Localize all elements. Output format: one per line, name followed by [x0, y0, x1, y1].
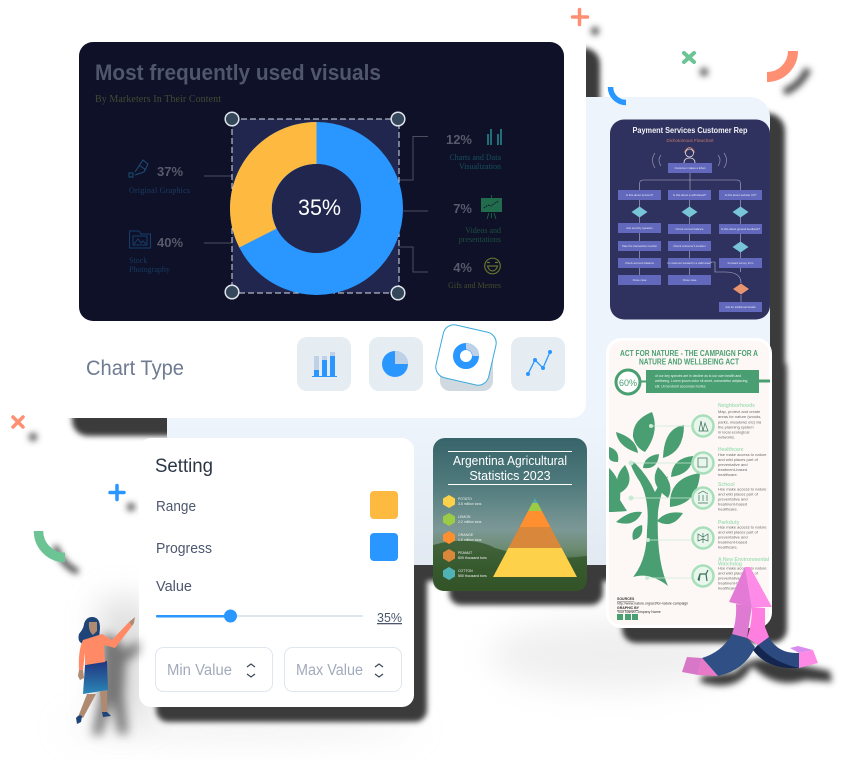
label: charts and data: Charts and Data [449, 153, 501, 162]
flowchart labels: Ask security question [626, 226, 653, 230]
decoration: orange plus [572, 10, 588, 24]
nature topic text: in local ecological [718, 430, 749, 434]
label: stock photography [129, 235, 183, 274]
nature topic text: A New Environmental [718, 557, 770, 563]
label: charts and data: Visualization [459, 162, 501, 171]
flowchart labels [622, 166, 760, 309]
flowchart title: Payment Services Customer Rep [632, 126, 748, 135]
pyramid legend: PEANUT [458, 551, 473, 555]
nature topic text: healthcare. [718, 472, 738, 477]
nature topic text: areas for nature (woods, [718, 414, 761, 419]
pyramid legend: ORANGE [458, 533, 474, 537]
icon: bar charts [487, 129, 502, 145]
nature topic text: healthcare. [718, 544, 738, 550]
stat banner: elit. Ut hendrerit accumsan fusfes. [655, 384, 706, 388]
panel: dark donut chart infographic [79, 42, 564, 321]
panel: setting card [139, 438, 414, 707]
label: original graphics: 37% [157, 164, 183, 179]
icon: photo folder [130, 231, 150, 248]
flowchart labels: Close case [633, 278, 647, 282]
connector lines [204, 136, 428, 272]
subheading: By Marketers In Their Content [95, 94, 221, 105]
stat banner: 60% [619, 378, 637, 388]
progress row [156, 533, 398, 561]
nature topic text: Watchdog [718, 562, 742, 568]
icon: presentation board [481, 195, 502, 219]
flowchart labels: Check account balance [625, 261, 654, 265]
label: videos: presentations [459, 235, 501, 244]
nature topic text: networks. [718, 434, 735, 440]
woman shadow [92, 634, 139, 735]
nature topic text: preventative and [718, 496, 748, 502]
flowchart labels: Check current balance [676, 227, 704, 231]
decoration: green cross [684, 53, 694, 62]
pyramid title [448, 451, 572, 485]
setting heading: Setting [155, 456, 213, 477]
label: videos [453, 201, 501, 244]
nature topic text: treatment-based [718, 502, 747, 506]
min value input: Min Value [167, 662, 232, 679]
decoration: green arc [38, 531, 65, 558]
pyramid legend: COTTON [458, 569, 473, 573]
tree illustration [609, 412, 700, 586]
sources: SOURCES [617, 597, 635, 601]
flowchart labels: Is this about a withdrawal? [673, 193, 706, 197]
dark drop shadows of panels [72, 48, 787, 722]
value slider [156, 610, 402, 625]
sources: http://www.nature.org/act/for-nature-campaign [617, 602, 688, 606]
label: original graphics: Original Graphics [129, 186, 190, 195]
pyramid chart [493, 498, 577, 577]
flowchart boxes [618, 163, 762, 312]
label: videos: Videos and [465, 226, 501, 235]
nature topic text: Hse make access to nature [718, 524, 767, 530]
nature topic text: Neighborhoods [718, 403, 755, 409]
pyramid title: Argentina Agricultural [453, 454, 567, 468]
pyramid legend: 3.8 million tons [458, 502, 482, 506]
decoration: blue arc [610, 87, 626, 102]
label: charts and data [446, 132, 501, 171]
illustration: 3D split arrow [682, 567, 818, 676]
nature topic text: Healthcare [718, 447, 744, 453]
nature topic text: and wild places part of [718, 457, 759, 462]
flowchart labels: Customer makes a ticket [675, 166, 706, 170]
pyramid legend: 1.6 million tons [458, 538, 482, 542]
decoration: orange cross left [13, 417, 23, 427]
flowchart labels: Is this about general feedback? [721, 227, 760, 231]
nature topic text: and wild places part of [718, 570, 759, 576]
progress row: Progress [156, 540, 212, 557]
nature topic text: treatment-based [718, 467, 747, 472]
label: videos: 7% [453, 201, 472, 216]
label: charts and data: 12% [446, 132, 472, 147]
panel: flowchart thumbnail [610, 120, 770, 320]
icon: headset agent [652, 148, 726, 168]
sources: GRAPHIC BY [617, 606, 640, 610]
panel: agriculture pyramid thumbnail [433, 438, 587, 591]
max value input: Max Value [296, 662, 363, 679]
donut chart [230, 122, 382, 274]
icon: laughing face [485, 258, 500, 274]
connectors [640, 173, 741, 302]
label: gifs and memes: 4% [453, 260, 472, 275]
stat banner [616, 370, 770, 394]
selection box [232, 119, 399, 293]
label: gifs and memes: Gifs and Memes [448, 281, 501, 290]
pyramid legend: 550 thousand tons [458, 574, 487, 578]
hills and field [433, 541, 587, 591]
flowchart labels: Take the transaction number [622, 244, 657, 248]
panel: light blue backdrop [167, 97, 770, 565]
selection handles [225, 112, 405, 300]
nature topic text: preventative and [718, 534, 748, 540]
max value input [284, 648, 402, 692]
range row [156, 491, 398, 519]
pyramid legend: LEMON [458, 515, 471, 519]
nature topic text: healthcare. [718, 506, 738, 512]
nature topic text: parks, meadows etc) via [718, 420, 762, 424]
nature topic text: Map, protect and create [718, 409, 761, 414]
nature title: NATURE AND WELLBEING ACT [639, 358, 739, 366]
donut chart: 35% [298, 195, 341, 220]
stat banner: wellbeing. Lorem ipsum dolor sit amet, consectetur adipiscing [655, 379, 747, 383]
pyramid legend: 809 thousand tons [458, 556, 487, 560]
value slider: 35% [377, 610, 402, 625]
flowchart subtitle: Dichotomous Flowchart [666, 138, 714, 143]
tree connector lines [630, 426, 692, 578]
flowchart labels: Is customer located in a valid area? [668, 261, 712, 265]
value label: Value [156, 578, 192, 595]
pyramid legend: 2.2 million tons [458, 520, 482, 524]
button: pie chart [369, 337, 423, 391]
decorative shape shadows [29, 27, 808, 572]
sources: Your Name/Company Name [617, 610, 661, 614]
nature topic text: Hse make access to nature [718, 486, 767, 492]
range row: Range [156, 498, 196, 515]
nature topic text: the planning system [718, 424, 754, 430]
social icons [617, 614, 638, 620]
nature topic circles [692, 416, 714, 586]
soft background shadows [60, 383, 730, 736]
min value input [156, 648, 272, 692]
decoration: orange arc [767, 51, 793, 77]
flowchart labels: Close case [683, 278, 697, 282]
panel: nature campaign thumbnail [608, 340, 770, 626]
panel: white chart editor [55, 30, 586, 418]
label: stock photography: 40% [157, 235, 183, 250]
nature topic text: preventative and [718, 462, 748, 467]
nature topic text: School [718, 482, 735, 488]
nature topic text: preventative and [718, 576, 748, 580]
sources [617, 597, 688, 614]
pyramid legend: POTATO [458, 497, 472, 501]
flowchart diamonds [632, 206, 749, 294]
nature title: ACT FOR NATURE - THE CAMPAIGN FOR A [620, 349, 758, 358]
nature topic text: healthcare. [718, 586, 738, 590]
nature topic text: and wild places part of [718, 530, 759, 534]
heading: Most frequently used visuals [95, 60, 381, 85]
button: line chart [511, 337, 565, 391]
nature topic text: treatment-based [718, 540, 747, 544]
label: gifs and memes [448, 260, 501, 290]
flowchart labels: Is this about website UX? [725, 193, 757, 197]
nature topic text: Hse make access to nature [718, 452, 767, 457]
pyramid legend [443, 495, 487, 580]
nature topic text [718, 403, 770, 590]
arrow shadow [700, 659, 832, 686]
icon: pen tool [129, 160, 148, 177]
nature topic text: Parkduty [718, 520, 740, 526]
stat banner: of our key species are in decline as is our own health and [655, 374, 741, 378]
nature topic icons [698, 421, 708, 581]
nature topic text: Hse make access to nature [718, 566, 767, 570]
heading: chart type: Chart Type [86, 357, 184, 380]
nature topic text: treatment-based [718, 580, 747, 586]
flowchart labels: Ask for additional details [725, 305, 756, 309]
flowchart labels: Is this about account? [626, 193, 654, 197]
button: bar chart [297, 337, 351, 391]
decoration: blue plus [110, 486, 124, 500]
nature topic text: and wild places part of [718, 492, 759, 496]
pyramid title: Statistics 2023 [469, 469, 551, 483]
label: stock photography: Stock [129, 256, 147, 265]
flowchart labels: Forward survey form [728, 261, 754, 265]
illustration: presenting woman [76, 617, 135, 724]
button: donut chart, selected [434, 323, 498, 391]
label: original graphics [129, 164, 190, 195]
label: stock photography: Photography [129, 265, 170, 274]
flowchart labels: Check customer's location [673, 244, 706, 248]
